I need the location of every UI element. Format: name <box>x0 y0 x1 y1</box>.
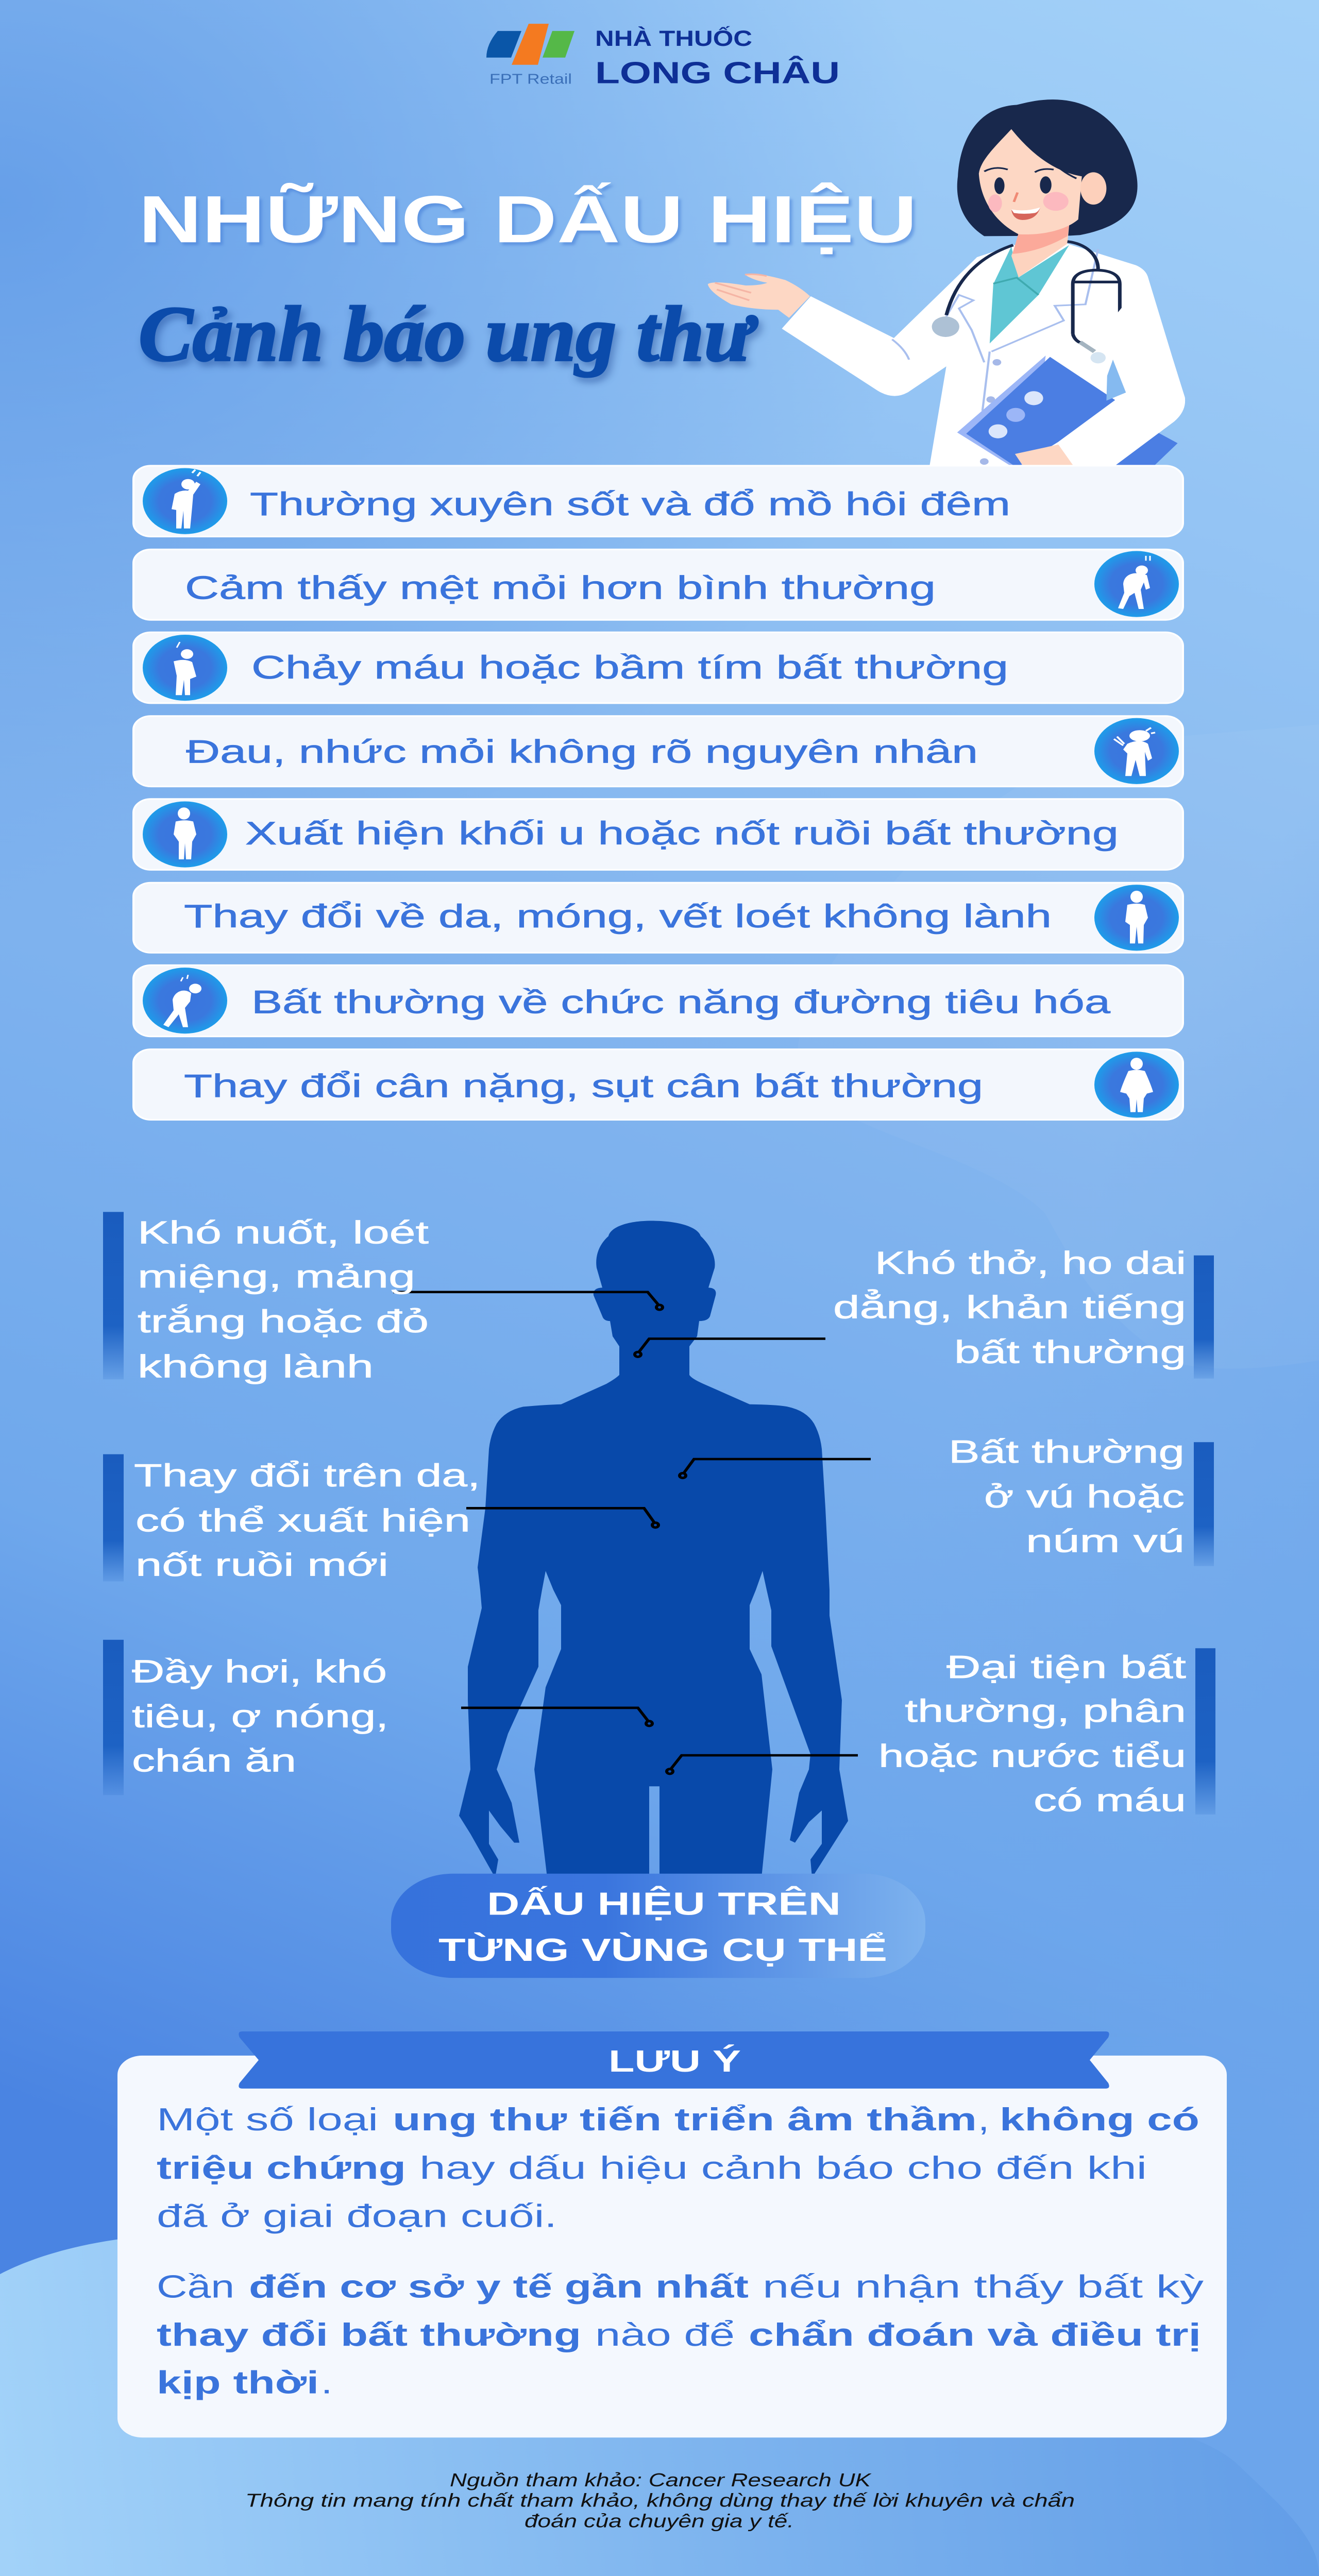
note paragraph 1: Một số loại <box>157 2102 378 2138</box>
row 5 <box>133 799 1183 870</box>
body silhouette <box>459 1221 848 1878</box>
row 4 text: Đau, nhức mỏi không rõ nguyên nhân <box>186 734 978 770</box>
nose <box>1014 193 1018 202</box>
row 8 text: Thay đổi cân nặng, sụt cân bất thường <box>184 1068 983 1105</box>
neck and chest <box>1011 225 1069 277</box>
row 6 text: Thay đổi về da, móng, vết loét không lành <box>184 898 1052 935</box>
ear <box>1080 172 1106 205</box>
callout: mouth: Khó nuốt, loét <box>138 1215 429 1250</box>
teeth <box>1011 207 1040 214</box>
callout: skin <box>103 1454 480 1583</box>
buttons <box>980 359 1001 465</box>
icon: person with pain <box>1094 718 1179 784</box>
logo caption: FPT Retail <box>489 71 572 87</box>
hair <box>957 99 1138 236</box>
icon: person with stomach ache <box>143 968 227 1033</box>
title: Những dấu hiệu: NHỮNG DẤU HIỆU <box>139 182 917 257</box>
note paragraph 1: hay dấu hiệu cảnh báo cho đến khi <box>419 2150 1147 2186</box>
callout: bowel: có máu <box>1034 1783 1186 1819</box>
footer source note: Nguồn tham khảo: Cancer Research UK <box>450 2470 872 2490</box>
note paragraph 1: không có <box>1000 2102 1199 2138</box>
note paragraph 2: thay đổi bất thường <box>157 2317 581 2353</box>
hand left <box>708 274 810 318</box>
footer source note <box>245 2470 1075 2531</box>
scrub collar <box>993 278 1039 295</box>
callout: bowel: thường, phân <box>905 1693 1186 1729</box>
note paragraph 2: chẩn đoán và điều trị <box>749 2317 1201 2353</box>
panel: body map <box>103 1212 1215 1978</box>
scrub top <box>990 245 1069 344</box>
note paragraph 2: nếu nhận thấy bất kỳ <box>763 2269 1204 2304</box>
row 8 <box>133 1049 1183 1120</box>
note paragraph 1: ung thư tiến triển âm thầm <box>393 2102 977 2138</box>
coat lines <box>892 249 1098 411</box>
subtitle: Cảnh báo ung thư: Cảnh báo ung thư <box>139 290 758 377</box>
panel: note <box>117 2031 1227 2437</box>
callout: digestion: Đầy hơi, khó <box>132 1654 387 1690</box>
face <box>979 129 1082 234</box>
row 3 text: Chảy máu hoặc bầm tím bất thường <box>251 650 1008 686</box>
eyes <box>994 176 1052 194</box>
row 6 <box>133 883 1183 953</box>
row 3 <box>133 632 1183 703</box>
callout: throat: Khó thở, ho dai <box>875 1245 1186 1281</box>
icon: person with bruise <box>143 635 227 701</box>
row 5 text: Xuất hiện khối u hoặc nốt ruồi bất thường <box>245 815 1119 852</box>
icon: tired person bending <box>1094 551 1179 617</box>
heading pill: body regions: DẤU HIỆU TRÊN <box>487 1886 841 1922</box>
callout: digestion: chán ăn <box>132 1743 296 1778</box>
callout: throat <box>833 1245 1214 1379</box>
note paragraph 1: đã ở giai đoạn cuối. <box>157 2198 557 2234</box>
icon: person with lump <box>143 801 227 868</box>
icon: person with fever <box>143 468 227 534</box>
callout: skin: Thay đổi trên da, <box>134 1458 480 1494</box>
illustration: doctor <box>708 99 1185 467</box>
icon: person with weight change <box>1094 1052 1179 1118</box>
cheeks <box>988 192 1069 212</box>
callout: mouth <box>103 1212 429 1384</box>
note paragraph 2 <box>157 2269 1204 2400</box>
hand right <box>1015 445 1075 467</box>
icon: person with skin change <box>1094 885 1179 951</box>
callout: breast: Bất thường <box>949 1434 1185 1470</box>
note ribbon <box>239 2031 1109 2089</box>
callout: digestion: tiêu, ợ nóng, <box>132 1699 388 1734</box>
note heading: LƯU Ý <box>608 2044 741 2078</box>
callout: mouth: miệng, mảng <box>138 1259 415 1295</box>
note paragraph 2: . <box>321 2365 332 2400</box>
callout: breast: núm vú <box>1026 1523 1185 1559</box>
note paragraph 1: , <box>978 2102 989 2138</box>
clipboard <box>957 355 1178 467</box>
row 2 text: Cảm thấy mệt mỏi hơn bình thường <box>185 570 936 606</box>
row 7 <box>133 965 1183 1037</box>
callout: throat: dẳng, khản tiếng <box>833 1289 1186 1326</box>
logo name line 2: LONG CHÂU <box>595 56 840 90</box>
row 4 <box>133 716 1183 787</box>
logo: FPT Retail Nhà thuốc Long Châu <box>486 24 840 90</box>
row 7 text: Bất thường về chức năng đường tiêu hóa <box>251 984 1111 1020</box>
footer source note: đoán của chuyên gia y tế. <box>525 2511 794 2531</box>
callout: breast: ở vú hoặc <box>984 1479 1185 1515</box>
row 2 <box>133 549 1183 620</box>
leader lines <box>393 1292 871 1774</box>
callout: mouth: không lành <box>138 1349 374 1384</box>
callout: bowel: hoặc nước tiểu <box>878 1738 1186 1774</box>
row 1 <box>133 466 1183 536</box>
callout: digestion <box>103 1640 388 1795</box>
note paragraph 2: đến cơ sở y tế gần nhất <box>249 2269 749 2304</box>
neck shadow <box>1012 225 1069 254</box>
note paragraph 2: nào để <box>595 2317 735 2353</box>
callout: bowel <box>878 1648 1215 1819</box>
icon: FPT bars <box>486 24 574 65</box>
logo name line 1: NHÀ THUỐC <box>595 26 752 51</box>
footer source note: Thông tin mang tính chất tham khảo, không dùng thay thế lời khuyên và chẩn <box>245 2490 1075 2511</box>
callout: skin: có thể xuất hiện <box>136 1503 470 1539</box>
callout: mouth: trắng hoặc đỏ <box>138 1303 429 1340</box>
panel: symptom list <box>133 466 1183 1120</box>
heading pill: body regions: TỪNG VÙNG CỤ THỂ <box>438 1932 887 1968</box>
mouth <box>1011 207 1040 220</box>
callout: bowel: Đại tiện bất <box>946 1649 1186 1685</box>
note card <box>117 2056 1227 2437</box>
callout: skin: nốt ruồi mới <box>136 1547 388 1583</box>
brows <box>984 159 1076 178</box>
callout: throat: bất thường <box>954 1334 1186 1370</box>
coat <box>782 244 1185 467</box>
note paragraph 2: kịp thời <box>157 2365 319 2400</box>
coat gap <box>1106 360 1126 401</box>
note paragraph 1 <box>157 2102 1199 2234</box>
note paragraph 2: Cần <box>157 2269 234 2304</box>
heading pill: body regions <box>391 1874 925 1978</box>
callout: breast <box>949 1434 1214 1566</box>
row 1 text: Thường xuyên sốt và đổ mồ hôi đêm <box>250 486 1010 522</box>
stethoscope <box>932 242 1120 363</box>
hand details <box>715 274 767 300</box>
right sleeve <box>1058 276 1185 467</box>
note paragraph 1: triệu chứng <box>157 2150 406 2186</box>
